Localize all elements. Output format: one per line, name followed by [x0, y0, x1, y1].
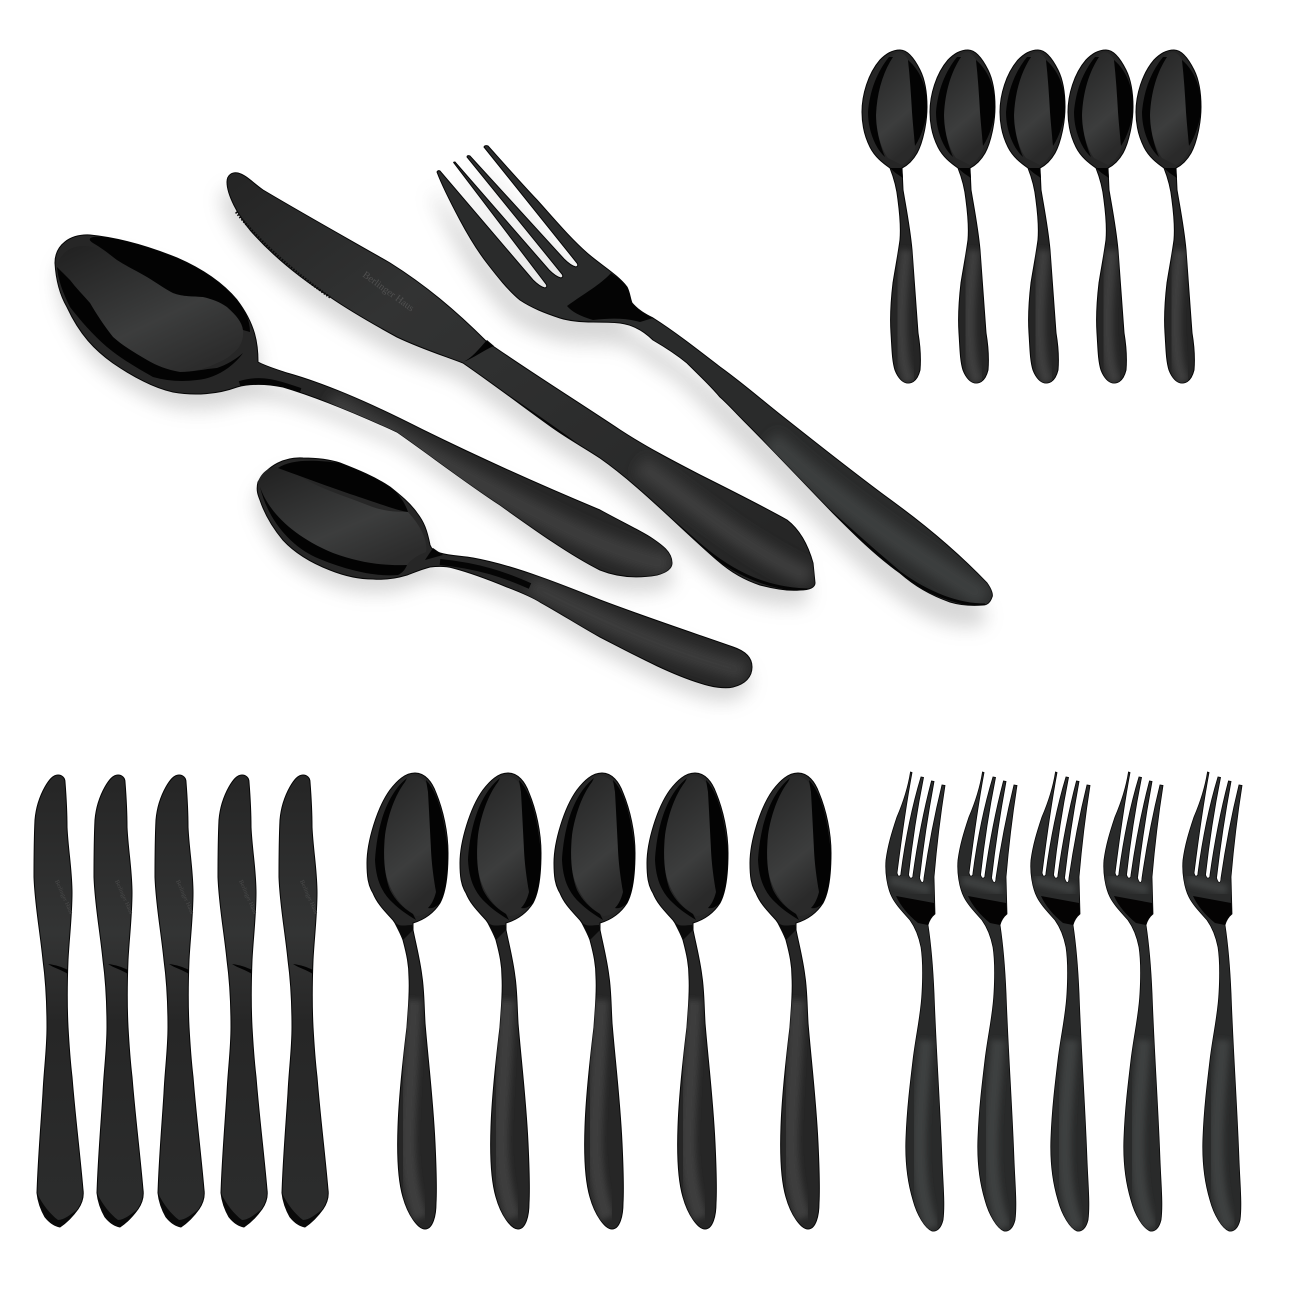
tea spoon 1 — [862, 50, 927, 383]
large table spoon — [55, 235, 672, 577]
knife brand mark: Berlinger Haus — [360, 270, 416, 314]
soft shadows under the main place setting — [57, 168, 986, 702]
tea spoon 5 — [1136, 50, 1201, 383]
knife 3 — [155, 775, 204, 1227]
table spoon 5 — [750, 773, 831, 1229]
fork 4 — [1104, 772, 1163, 1231]
knife 4 — [218, 775, 267, 1227]
large table knife — [227, 173, 815, 590]
fork 2 — [958, 772, 1017, 1231]
knife serrations — [236, 212, 331, 298]
knife 1 — [34, 775, 83, 1227]
tea spoon 4 — [1068, 50, 1133, 383]
tea spoon 3 — [1000, 50, 1065, 383]
fork 3 — [1031, 772, 1090, 1231]
knife row — [34, 775, 328, 1227]
tea spoon row — [862, 50, 1201, 383]
spoon handle — [240, 382, 670, 565]
knife 2 — [94, 775, 143, 1227]
table spoon 4 — [647, 773, 728, 1229]
table spoon 3 — [554, 773, 635, 1229]
small dessert spoon — [257, 458, 752, 688]
fork handle — [763, 434, 992, 605]
spoon bowl interior — [57, 246, 243, 372]
table spoon 2 — [460, 773, 541, 1229]
fork row — [886, 772, 1242, 1231]
fork 1 — [886, 772, 945, 1231]
table spoon row — [367, 773, 831, 1229]
table spoon 1 — [367, 773, 448, 1229]
blade and handle crease — [463, 340, 494, 362]
small spoon bowl interior — [258, 467, 426, 568]
large table fork — [437, 146, 992, 605]
fork 5 — [1183, 772, 1242, 1231]
main place setting — [55, 146, 992, 688]
knife 5 — [279, 775, 328, 1227]
small spoon handle — [440, 562, 745, 672]
knife handle — [508, 394, 814, 590]
fork neck reflection — [567, 273, 653, 322]
tea spoon 2 — [930, 50, 995, 383]
